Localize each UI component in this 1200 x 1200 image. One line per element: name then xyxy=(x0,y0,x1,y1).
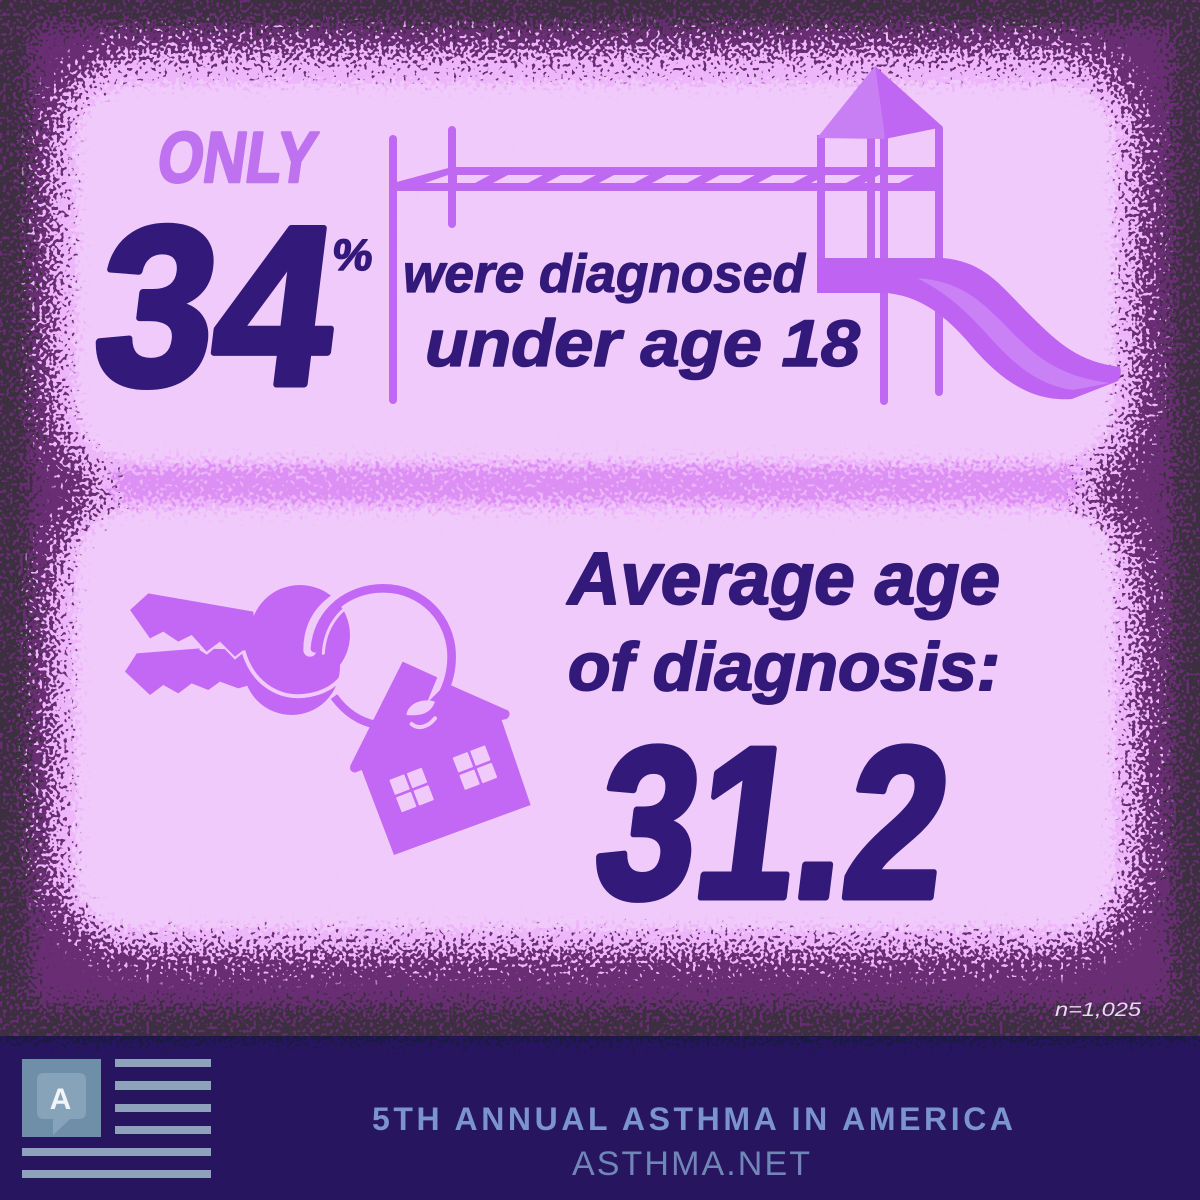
tower frame xyxy=(817,125,943,405)
text: were diagnosed: were diagnosed xyxy=(403,244,806,304)
text: 31.2: 31.2 xyxy=(584,703,962,943)
footer bar xyxy=(0,1020,1200,1200)
panel: playground statistic xyxy=(72,80,1118,464)
panel: average age statistic xyxy=(72,506,1118,932)
footer title: 5TH ANNUAL ASTHMA IN AMERICA xyxy=(372,1101,1013,1137)
key: front xyxy=(130,585,350,696)
house windows xyxy=(389,768,434,812)
footer website: ASTHMA.NET xyxy=(572,1145,810,1183)
text: under age 18: under age 18 xyxy=(425,306,860,380)
icon: playground with monkey bars and slide xyxy=(389,66,1121,405)
icon: flag logo xyxy=(22,1059,211,1178)
speech bubble xyxy=(37,1073,86,1135)
text: Average age: Average age xyxy=(566,537,1000,620)
text: 34: 34 xyxy=(83,181,350,433)
key: rear xyxy=(125,618,340,715)
text: sample size: n=1,025 xyxy=(1055,1000,1142,1021)
tower roof xyxy=(817,66,943,139)
icon: keys with house keychain xyxy=(125,585,531,855)
text: percent sign: % xyxy=(330,231,376,280)
house tag xyxy=(350,662,531,855)
monkey bars xyxy=(389,126,935,404)
key ring xyxy=(310,587,452,725)
logo letter: A xyxy=(50,1083,71,1116)
flag stripes xyxy=(22,1059,211,1178)
text: of diagnosis: of diagnosis: xyxy=(568,629,1000,705)
text: ONLY: ONLY xyxy=(153,118,322,198)
slide xyxy=(817,258,1121,399)
